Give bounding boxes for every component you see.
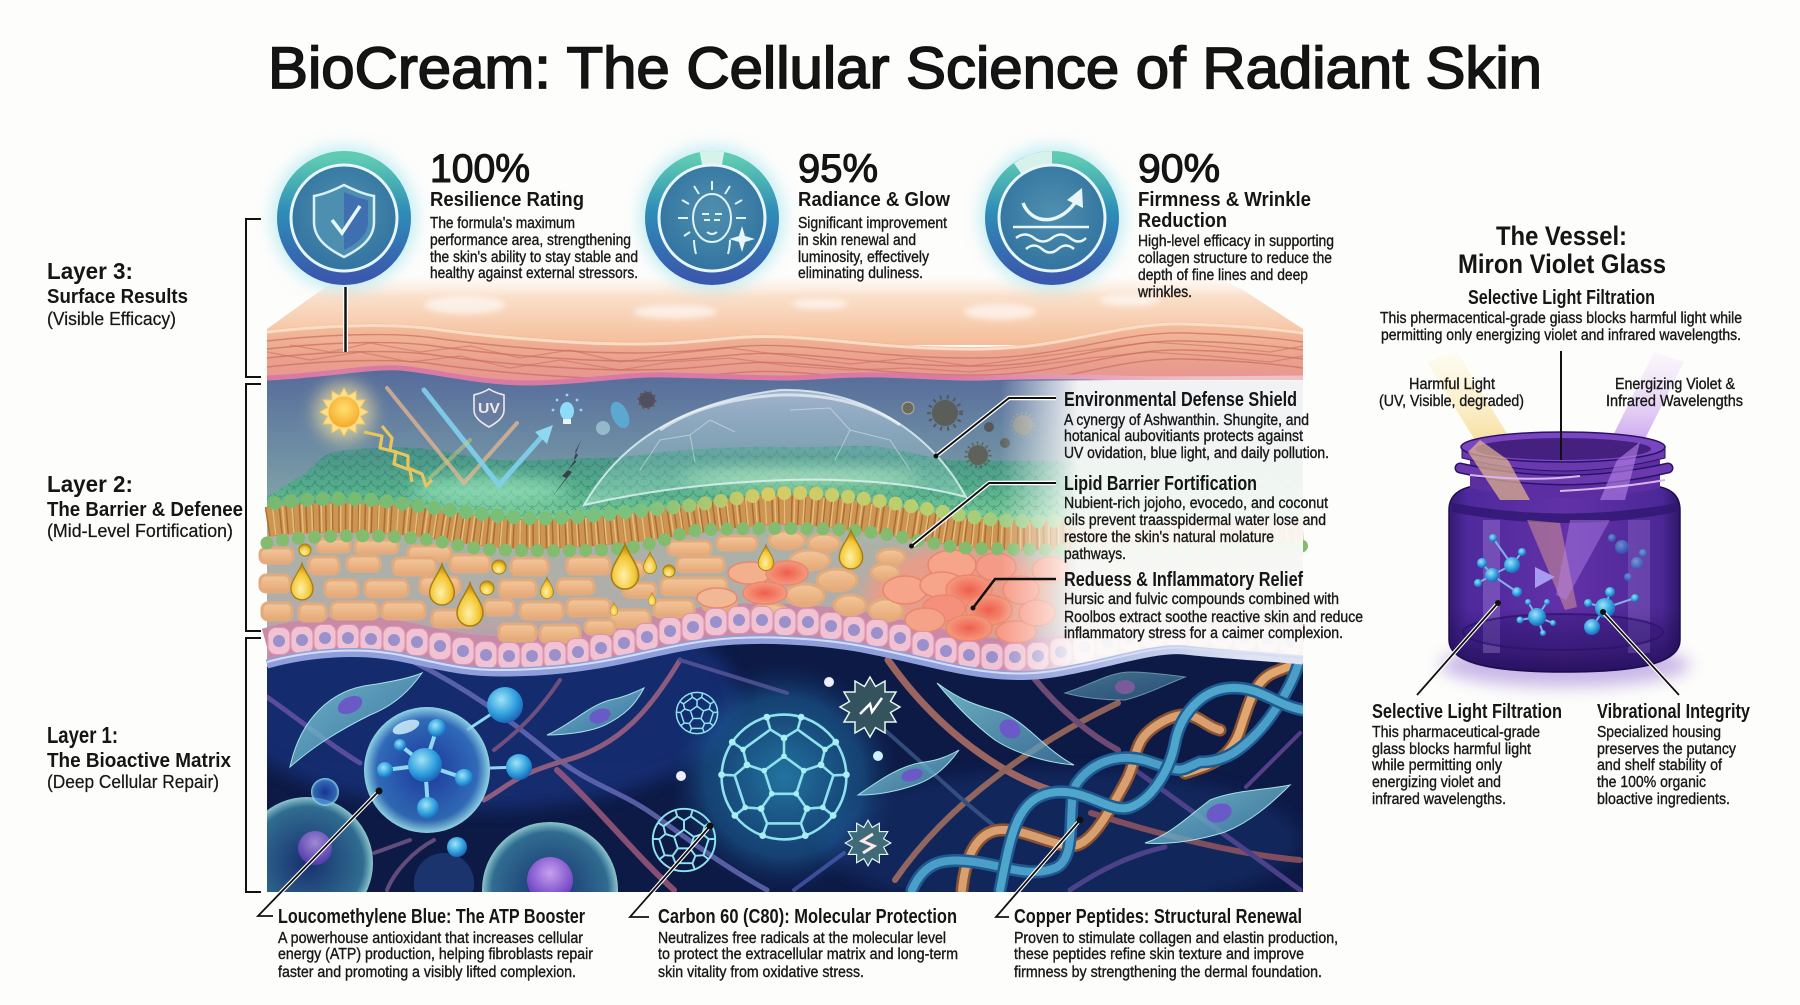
connector from shield to skin [343,287,348,352]
icon: violet glass jar [1427,352,1690,687]
callout: copper peptides: Copper Peptides: Structural Renewal [1014,906,1302,928]
icon: wave and lift badge [980,146,1124,290]
fibroblast nuclei [335,680,1234,826]
stat text: 100% [430,147,530,191]
carbon 60 fullerenes [653,692,850,871]
pink epidermis band [267,322,1303,400]
callout: selective light filtration [1371,600,1562,808]
heading: the vessel: Miron Violet Glass [1458,249,1666,279]
stat text: Significant improvement [798,215,948,232]
callout: redness and inflammatory relief: inflammatory stress for a caimer complexion. [1064,625,1343,642]
layer 1 label: The Bioactive Matrix [47,750,231,772]
UV shield icon: UV [478,400,500,417]
heading: the vessel: The Vessel: [1496,221,1627,251]
layer 3 label [47,258,188,329]
stat text: collagen structure to reduce the [1138,250,1332,267]
layer 2 label: (Mid-Level Fortification) [47,521,233,541]
basal pink cell row [268,606,1302,670]
callout: carbon 60: to protect the extracellular matrix and long-term [658,946,958,963]
callout: lipid barrier fortification: restore the skin's natural molature [1064,529,1274,546]
methylene blue sphere with molecule [267,687,618,892]
callout: lipid barrier fortification: pathways. [1064,546,1126,563]
callout: selective light filtration: glass blocks harmful light [1372,741,1532,758]
inflamed red cells [697,550,1068,643]
label: harmful light: Harmful Light [1409,376,1496,393]
right side fade for callouts [985,380,1303,700]
callout: environmental defense shield: Environmental Defense Shield [1064,389,1297,411]
callout: lipid barrier fortification: Lipid Barrier Fortification [1064,473,1257,495]
callout: copper peptides: firmness by strengthening the dermal foundation. [1014,964,1322,981]
layer 2 label: The Barrier & Defenee [47,499,243,521]
stat text: healthy against external stressors. [430,265,638,282]
layer 3 label: (Visible Efficacy) [47,309,176,329]
blue light bulb icon [552,394,582,424]
leader line into jar [1560,351,1562,460]
layer 3 label: Surface Results [47,286,188,308]
fibroblast cells [290,672,1290,843]
layer 1 label: (Deep Cellular Repair) [47,772,219,792]
callout: selective light filtration: Selective Light Filtration [1372,701,1562,723]
stat text [430,147,638,282]
callout: leucomethylene blue: energy (ATP) production, helping fibroblasts repair [278,946,593,963]
callout: leucomethylene blue: faster and promoting a visibly lifted complexion. [278,964,576,981]
stat text: Resilience Rating [430,189,584,211]
free radical stars [676,677,900,866]
callout: lipid barrier fortification: Nubient-rich jojoho, evocedo, and coconut [1064,495,1329,512]
salmon inflammatory wash [865,545,1055,645]
label: energizing violet and infrared: Energizing Violet & [1615,376,1736,393]
callout: selective light filtration: while permitting only [1371,757,1502,774]
virus particles [902,397,1035,467]
text block: selective light filtration top: This phermacentical-grade giass blocks harmful light while [1380,310,1742,327]
stat text: eliminating duliness. [798,265,923,282]
stat text: Radiance & Glow [798,189,950,211]
layer 1 label [47,722,231,792]
callout: carbon 60: skin vitality from oxidative stress. [658,964,864,981]
light beams entering jar [1427,352,1684,468]
callout: redness and inflammatory relief: Hursic and fulvic compounds combined with [1064,591,1339,608]
stat text: in skin renewal and [798,232,916,249]
callout: environmental defense shield: UV ovidation, blue light, and daily pollution. [1064,445,1329,462]
wavy UV rays [364,426,432,486]
jar molecules [1474,534,1647,636]
stat: 90% firmness and wrinkle reduction [980,146,1334,301]
callout: copper peptides: Proven to stimulate collagen and elastin production, [1014,930,1338,947]
collagen fibers [267,660,1300,890]
callout: vibrational integrity: preserves the putancy [1597,741,1736,758]
callout: leucomethylene blue: A powerhouse antioxidant that increases cellular [278,930,583,947]
UV shield icon [474,389,504,427]
basement membrane [267,637,1303,676]
tan cell region background [267,510,1303,700]
stat text: Firmness & Wrinkle [1138,189,1311,211]
lipid bilayer tails and heads [267,493,1303,551]
callout: vibrational integrity: bloactive ingredients. [1597,791,1730,808]
stat text: Reduction [1138,210,1227,232]
bracket: layer 1 [246,638,261,892]
callout: redness and inflammatory relief: Reduess & Inflammatory Relief [1064,569,1303,591]
layer 3 label: Layer 3: [47,258,133,284]
text block: selective light filtration top: Selective Light Filtration [1468,287,1655,309]
deep dermal matrix [267,644,1303,892]
skin surface peach [267,275,1303,345]
callout: copper peptides [996,816,1338,981]
sun [314,382,374,442]
stat text: performance area, strengthening [430,232,631,249]
callout: lipid barrier fortification [909,473,1329,563]
stat text: luminosity, effectively [798,249,929,266]
callout: selective light filtration: energizing violet and [1372,774,1501,791]
text block: selective light filtration top [1380,287,1742,344]
label: energizing violet and infrared [1606,376,1743,410]
callout: environmental defense shield: hotanical aubovitiants protects against [1064,428,1304,445]
callout: vibrational integrity: Specialized housing [1597,724,1721,741]
brick keratinocyte cells [260,531,905,642]
title: BioCream: The Cellular Science of Radiant Skin [268,36,1542,101]
blue environment layer [267,368,1303,540]
panel: skin cross-section illustration [258,281,1308,892]
callout: carbon 60: Neutralizes free radicals at the molecular level [658,930,946,947]
stat text: The formula's maximum [430,215,575,232]
text block: selective light filtration top: permitting only energizing violet and infrared wavelengths. [1381,327,1741,344]
layer 2 label: Layer 2: [47,471,133,497]
pollution particles [552,392,655,497]
label: energizing violet and infrared: Infrared Wavelengths [1606,393,1743,410]
callout: selective light filtration: infrared wavelengths. [1372,791,1506,808]
callout: vibrational integrity: Vibrational Integrity [1597,701,1751,723]
callout: leucomethylene blue: Loucomethylene Blue: The ATP Booster [278,906,585,928]
callout: carbon 60 [630,822,958,981]
layer 2 label [47,471,243,541]
stat text: 90% [1138,147,1220,191]
callout: redness and inflammatory relief: Roolbos extract soothe reactive skin and reduce [1064,609,1363,626]
callout: environmental defense shield [934,389,1329,462]
stat text: wrinkles. [1137,284,1192,301]
callout: carbon 60: Carbon 60 (C80): Molecular Protection [658,906,957,928]
callout: vibrational integrity: and shelf stability of [1597,757,1723,774]
callout: selective light filtration: This pharmaceutical-grade [1372,724,1540,741]
label: harmful light: (UV, Visible, degraded) [1379,393,1524,410]
bracket: layer 3 [246,219,261,377]
jar neck and threaded rim [1460,432,1668,500]
callout: vibrational integrity: the 100% organic [1597,774,1706,791]
callout: leucomethylene blue [258,788,593,981]
bracket: layer 2 [246,384,261,631]
callout: vibrational integrity [1597,609,1751,808]
icon: radiant face badge [640,146,784,290]
callout: copper peptides: these peptides refine skin texture and improve [1014,946,1304,963]
copper peptide helix [912,664,1303,890]
heading: the vessel [1458,221,1666,279]
callout: redness and inflammatory relief [970,569,1363,642]
green scale hills [267,446,1303,540]
stat: 95% radiance and glow [640,146,950,290]
glass dome shield [584,390,966,505]
callout: environmental defense shield: A cynergy of Ashwanthin. Shungite, and [1064,412,1309,429]
golden oil droplets [291,530,863,626]
icon: shield badge [272,146,416,290]
stat text: the skin's ability to stay stable and [430,249,638,266]
label: harmful light [1379,376,1524,410]
stat: 100% resilience rating [272,146,638,290]
stat text [798,147,950,282]
stat text: depth of fine lines and deep [1138,267,1308,284]
layer 1 label: Layer 1: [47,722,118,748]
stat text: High-level efficacy in supporting [1138,233,1334,250]
stat text [1137,147,1334,301]
stat text: 95% [798,147,878,191]
pink basal band [267,622,1303,659]
reflected light rays [387,388,553,485]
callout: lipid barrier fortification: oils prevent traasspidermal water lose and [1064,512,1326,529]
